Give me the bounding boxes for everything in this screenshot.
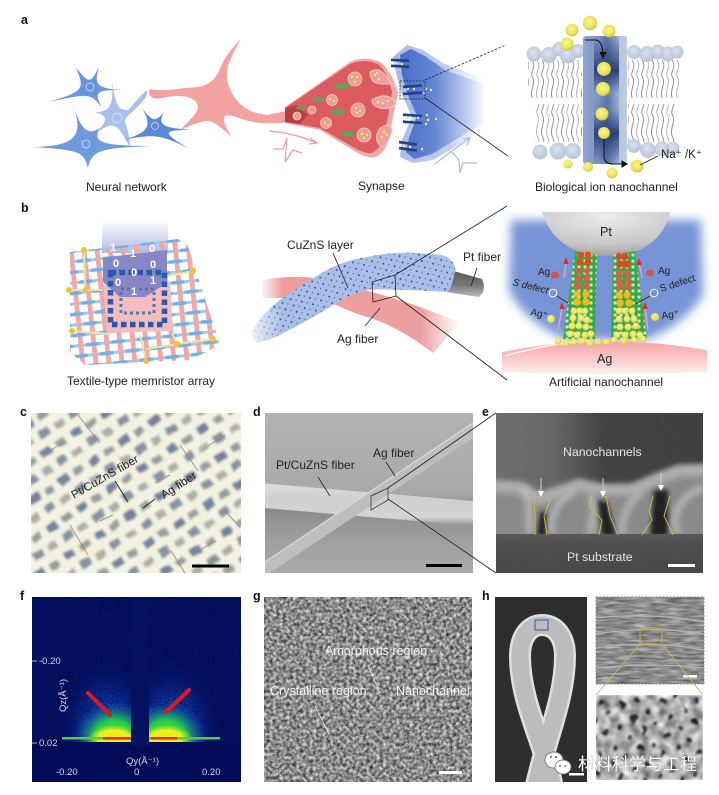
S defect leader lines bbox=[557, 296, 650, 304]
axis labels: Qy(Å⁻¹) bbox=[126, 756, 159, 767]
Ag label: Ag bbox=[597, 352, 612, 366]
panel g: TEM image bbox=[253, 589, 472, 782]
inner electrode ring bbox=[121, 289, 154, 313]
zoom box and dashed leader lines bbox=[400, 45, 508, 156]
bits: 0 bbox=[131, 267, 137, 279]
caption: biological ion nanochannel: Biological ion nanochannel bbox=[535, 180, 678, 194]
red migration arrows bbox=[558, 259, 648, 330]
scale bar bbox=[569, 773, 584, 776]
yellow addressing wires bbox=[69, 250, 213, 361]
zoomed surface image bbox=[596, 597, 704, 684]
red arrows bbox=[88, 690, 189, 715]
crossing fibers bbox=[248, 206, 507, 380]
ions bbox=[560, 16, 644, 178]
annotation Ag fiber: Ag fiber bbox=[159, 470, 199, 502]
yellow contacts bbox=[66, 247, 216, 364]
loop edge bbox=[520, 625, 565, 790]
zoom leader lines bbox=[388, 413, 496, 573]
blue zoom box bbox=[535, 620, 548, 630]
red hot spots bbox=[103, 737, 177, 740]
yellow scatter bbox=[89, 726, 131, 742]
small annotations: Ag⁺ bbox=[661, 309, 680, 322]
Nanochannels label: Nanochannels bbox=[563, 445, 642, 459]
annotation Pt/CuZnS fiber: Pt/CuZnS fiber bbox=[70, 453, 141, 502]
channel cylinder bbox=[583, 36, 627, 164]
neuron bottom left bbox=[33, 100, 153, 168]
scattering image bbox=[32, 597, 241, 795]
horizontal fiber bbox=[265, 484, 473, 526]
beam stop bbox=[131, 597, 149, 747]
vesicle contents bbox=[324, 72, 389, 139]
purple switched region bbox=[103, 250, 167, 297]
right CuZnS strip bbox=[611, 251, 647, 339]
small zoom box bbox=[372, 275, 396, 302]
small annotations: Ag⁺ bbox=[529, 307, 549, 322]
label f: f bbox=[20, 589, 25, 603]
panel f: scattering map bbox=[20, 589, 241, 795]
textile memristor array bbox=[66, 219, 220, 365]
left CuZnS strip bbox=[563, 251, 597, 339]
bright rim bbox=[490, 470, 710, 499]
TEM texture bbox=[264, 597, 472, 782]
pockets bbox=[370, 70, 396, 147]
annotation Ag fiber: Ag fiber bbox=[373, 446, 414, 460]
axis labels: 0.02 bbox=[39, 738, 58, 749]
film grain bbox=[496, 413, 703, 573]
caption: textile-type memristor array: Textile-type memristor array bbox=[67, 374, 215, 388]
yellow channel outlines bbox=[534, 496, 673, 535]
lipid tails bbox=[528, 60, 680, 142]
Nanochannel label: Nanochannel bbox=[396, 684, 470, 698]
red action potential arrow bbox=[269, 131, 317, 162]
floor highlight bbox=[505, 341, 590, 356]
Amorphous region label: Amorphous region bbox=[325, 644, 427, 658]
scale bar bbox=[668, 564, 695, 567]
pore micrograph bbox=[586, 685, 716, 795]
Pt label: Pt bbox=[600, 225, 612, 239]
leader lines bbox=[315, 665, 380, 734]
mitochondria bbox=[296, 83, 355, 137]
Na/K label with leader: Na⁺ /K⁺ bbox=[661, 149, 702, 161]
blue post-synaptic potential arrow bbox=[435, 138, 477, 173]
zoom box bbox=[371, 488, 388, 510]
axis labels: 0 bbox=[134, 767, 139, 778]
caption: synapse: Synapse bbox=[358, 179, 405, 193]
bits: 0 bbox=[150, 259, 156, 271]
bits: 1 bbox=[110, 242, 116, 254]
annotation Pt/CuZnS fiber bbox=[276, 458, 355, 496]
filament atoms bbox=[555, 252, 646, 346]
leader lines bbox=[395, 206, 507, 380]
bits: 1 bbox=[131, 286, 137, 298]
scale bar bbox=[426, 564, 462, 567]
released ions bbox=[387, 62, 437, 150]
blue background bbox=[509, 220, 703, 340]
post-synaptic blue terminal bbox=[393, 45, 487, 163]
caption: neural network: Neural network bbox=[86, 180, 168, 194]
pink central region bbox=[103, 282, 173, 333]
label g: g bbox=[253, 589, 261, 603]
film body bbox=[496, 463, 703, 534]
Pt substrate label: Pt substrate bbox=[567, 550, 633, 564]
label Ag fiber: Ag fiber bbox=[337, 332, 378, 346]
label CuZnS layer: CuZnS layer bbox=[287, 238, 354, 252]
axis labels bbox=[32, 656, 220, 778]
panel b: textile memristor bbox=[21, 201, 707, 389]
small annotations bbox=[511, 266, 697, 322]
speckle overlay bbox=[32, 597, 241, 747]
bright lobes near channels bbox=[522, 487, 705, 534]
SEM image bbox=[265, 413, 473, 576]
small annotations: S defect bbox=[511, 277, 551, 297]
axis labels: Qz(Å⁻¹) bbox=[58, 679, 69, 712]
neuron right bbox=[123, 108, 193, 150]
woven photo bbox=[31, 413, 241, 573]
panel e: nanochannels cross section bbox=[482, 405, 710, 574]
bits: 0 bbox=[113, 258, 119, 270]
yellow zoom lines bbox=[596, 644, 703, 695]
axis labels: -0.20 bbox=[39, 656, 61, 667]
neuron centre pale bbox=[95, 82, 148, 147]
synapse red bouton bbox=[285, 58, 398, 157]
vesicles bbox=[293, 72, 371, 142]
neuron top bbox=[48, 67, 120, 108]
axis labels: 0.20 bbox=[202, 767, 220, 778]
light beam bbox=[102, 219, 168, 253]
red neuron bbox=[149, 39, 290, 137]
Ag floor bbox=[502, 341, 707, 374]
panel h: bent fiber and pores bbox=[482, 590, 704, 782]
Na/K label with leader bbox=[640, 149, 702, 165]
label e: e bbox=[482, 405, 489, 419]
bent fiber SEM bbox=[495, 597, 587, 790]
scale bar bbox=[439, 771, 462, 774]
bits: 1 bbox=[130, 248, 136, 260]
panel c: textile photo bbox=[20, 409, 241, 573]
bits: 0 bbox=[115, 277, 121, 289]
wechat icon bbox=[545, 752, 571, 774]
panel d: SEM crossing fibers bbox=[253, 405, 496, 576]
bits: 1 bbox=[150, 275, 156, 287]
caption: artificial nanochannel: Artificial nanochannel bbox=[549, 375, 663, 389]
small annotations: Ag bbox=[538, 267, 550, 278]
annotation Ag fiber bbox=[143, 470, 199, 508]
ion channels in membrane bbox=[391, 59, 422, 152]
sparse background counts bbox=[32, 597, 241, 747]
white arrows bbox=[538, 473, 664, 497]
left fade bbox=[248, 310, 284, 346]
label CuZnS layer bbox=[287, 238, 354, 288]
woven fibers bbox=[70, 239, 220, 365]
neural network blue neurons bbox=[33, 67, 193, 168]
horizon line bbox=[62, 737, 220, 740]
label c: c bbox=[20, 405, 27, 419]
lower background bbox=[32, 742, 241, 782]
loop surface bbox=[520, 625, 565, 790]
neuron bodies highlights bbox=[82, 83, 158, 148]
watermark bbox=[545, 752, 697, 774]
fiber threads bbox=[51, 415, 240, 573]
Crystalline region label: Crystalline region bbox=[270, 684, 367, 698]
label Pt fiber: Pt fiber bbox=[463, 250, 501, 264]
watermark text: 材料科学与工程 bbox=[578, 755, 697, 774]
label b: b bbox=[21, 201, 29, 215]
green scatter bbox=[76, 704, 131, 742]
Ag atoms, defects and ions bbox=[547, 270, 659, 323]
Ag fiber bbox=[262, 277, 460, 353]
annotation Ag fiber bbox=[373, 446, 414, 476]
blue scatter bbox=[64, 669, 131, 742]
bits bbox=[110, 242, 156, 298]
label Ag fiber bbox=[337, 308, 380, 346]
bits: 0 bbox=[149, 243, 155, 255]
surface ridges bbox=[596, 616, 704, 668]
transit arrow bbox=[585, 40, 627, 167]
artificial nanochannel diagram bbox=[502, 212, 707, 374]
dark tip bbox=[285, 105, 308, 124]
scale bar bbox=[683, 675, 697, 678]
diagonal fiber bbox=[265, 423, 473, 576]
electrode square ring bbox=[110, 272, 164, 324]
yellow box bbox=[640, 629, 662, 644]
Pt tip bbox=[542, 212, 670, 256]
annotation Pt/CuZnS fiber: Pt/CuZnS fiber bbox=[276, 458, 355, 472]
label Pt fiber bbox=[463, 250, 501, 286]
lipid heads bbox=[526, 42, 684, 160]
label a: a bbox=[21, 13, 29, 27]
scale bar bbox=[192, 564, 229, 568]
channels bbox=[537, 490, 668, 536]
label h: h bbox=[482, 589, 490, 603]
label d: d bbox=[253, 405, 261, 419]
panel a: neural network to ion channel bbox=[21, 13, 702, 194]
substrate bbox=[496, 534, 703, 574]
axis labels: -0.20 bbox=[56, 767, 78, 778]
CuZnS porous layer bbox=[250, 253, 455, 343]
SEM image bbox=[490, 413, 710, 574]
small annotations: Ag bbox=[658, 266, 670, 277]
biological ion nanochannel diagram bbox=[526, 16, 702, 178]
Pt fiber bbox=[446, 270, 484, 297]
small annotations: S defect bbox=[659, 273, 697, 295]
